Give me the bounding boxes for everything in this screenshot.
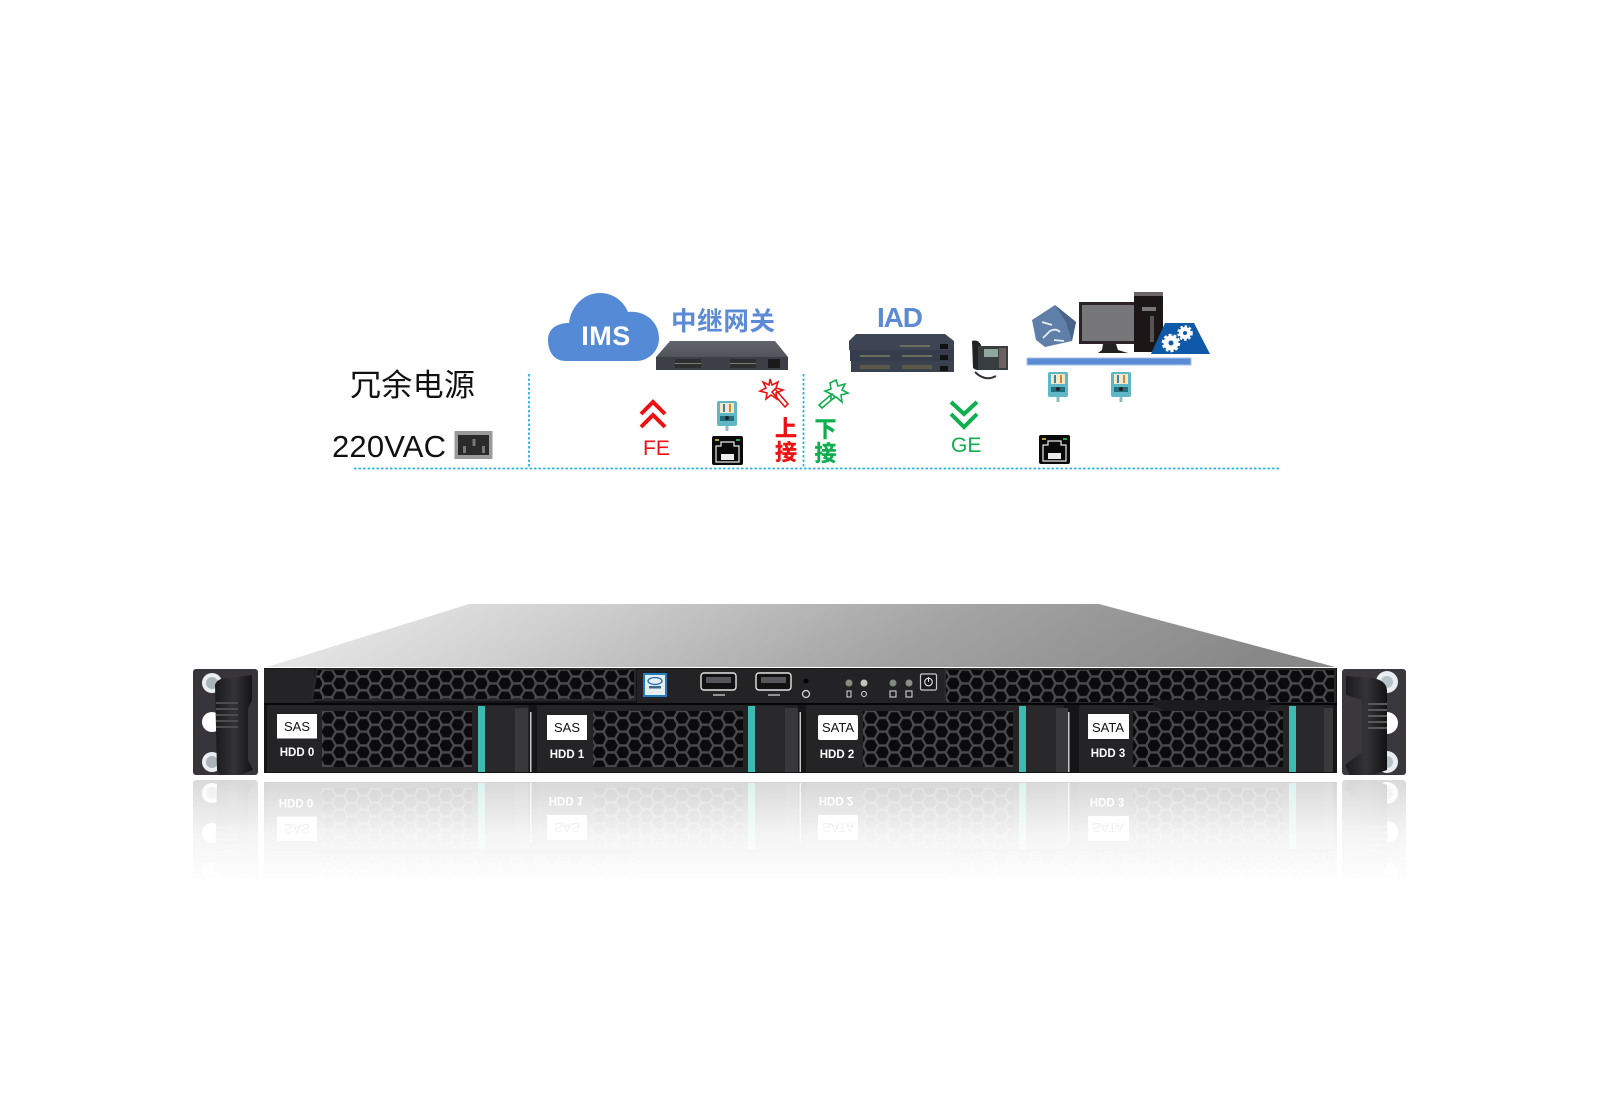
reflection of server: SATA xyxy=(1092,820,1124,835)
icon: red double chevron up xyxy=(641,402,665,427)
label: FE: FE xyxy=(643,437,670,460)
reflection of server: SAS xyxy=(554,820,580,835)
drive bay numbers xyxy=(280,747,1125,761)
heading: trunk gateway: 中继网关 xyxy=(671,308,775,336)
intel badge xyxy=(643,673,667,697)
icon: green double chevron down xyxy=(951,402,977,427)
server xyxy=(193,604,1406,775)
USB symbols xyxy=(713,694,780,696)
label: GE: GE xyxy=(951,434,981,457)
icon: RJ45 port 2 xyxy=(1039,435,1070,464)
drive bay labels: SAS xyxy=(554,720,580,735)
reflection of server: SAS xyxy=(284,821,310,836)
label: downlink: 接 xyxy=(814,441,837,466)
icon: RJ45 port xyxy=(712,436,743,465)
label: uplink: 接 xyxy=(775,440,797,465)
icon: desktop computer xyxy=(1079,292,1163,353)
icon: network card 2 xyxy=(1048,372,1068,402)
USB ports xyxy=(701,673,791,690)
reflection of server: HDD 1 xyxy=(549,794,584,806)
icon: red magic wand xyxy=(760,379,788,407)
reflection of server xyxy=(180,773,1420,905)
reflection of server: HDD 2 xyxy=(819,794,853,806)
power button xyxy=(920,674,936,690)
LAN bus bar xyxy=(1027,358,1191,365)
label: downlink xyxy=(814,417,837,466)
icon: power socket xyxy=(454,431,492,459)
drive bay labels: SATA xyxy=(822,720,854,735)
icon: IAD stacked device xyxy=(849,334,954,372)
dotted divider lines xyxy=(354,374,1280,468)
icon: telephone xyxy=(972,340,1008,378)
icon: green magic wand xyxy=(819,380,848,408)
label: IAD: IAD xyxy=(877,302,923,333)
label: 220VAC: 220VAC xyxy=(332,429,446,464)
label: uplink: 上 xyxy=(775,416,797,441)
icon: IMS cloud xyxy=(548,293,659,361)
reflection of server: HDD 0 xyxy=(279,796,313,808)
status LEDs xyxy=(846,680,912,697)
label: downlink: 下 xyxy=(814,417,837,442)
icon: router xyxy=(1032,305,1076,347)
drive bay numbers: HDD 0 xyxy=(280,747,314,759)
drive bay numbers: HDD 3 xyxy=(1091,748,1125,760)
server top cover xyxy=(267,604,1335,667)
server front chassis xyxy=(193,668,1406,775)
reset pinhole and icon xyxy=(802,678,810,698)
drive bay numbers: HDD 1 xyxy=(550,749,585,761)
icon: blue gear panel xyxy=(1151,323,1210,354)
drive bay labels xyxy=(284,719,1124,735)
icon: IMS cloud: IMS xyxy=(581,321,631,351)
drive bay numbers: HDD 2 xyxy=(820,749,854,761)
icon: network card xyxy=(717,401,737,431)
label: uplink xyxy=(775,416,797,465)
icon: trunk gateway device xyxy=(656,341,788,370)
drive bay labels: SAS xyxy=(284,719,310,734)
label: redundant power: 冗余电源 xyxy=(350,368,475,403)
drive bay labels: SATA xyxy=(1092,720,1124,735)
diagram: network connections xyxy=(332,292,1280,468)
reflection of server: HDD 3 xyxy=(1090,795,1124,807)
icon: network card 3 xyxy=(1111,372,1131,402)
reflection of server: SATA xyxy=(822,820,854,835)
